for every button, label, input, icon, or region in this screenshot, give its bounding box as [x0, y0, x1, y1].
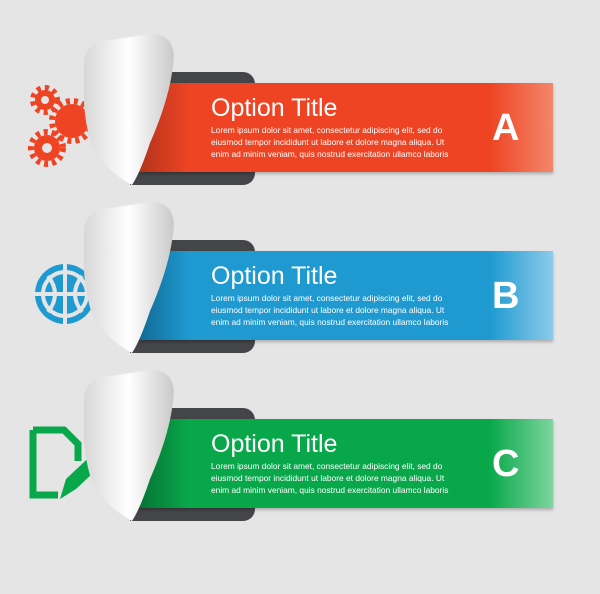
text C	[211, 461, 448, 495]
banner B	[130, 251, 553, 340]
icon: document pencil	[30, 426, 90, 499]
text C: enim ad minim veniam, quis nostrud exercitation ullamco laboris	[211, 485, 448, 495]
paper curl A	[84, 35, 174, 185]
letter A: A	[492, 107, 519, 149]
dark band	[130, 408, 255, 521]
item B	[35, 203, 554, 353]
banner A	[130, 83, 553, 172]
title A: Option Title	[211, 94, 337, 122]
dark band	[130, 72, 255, 185]
text A: enim ad minim veniam, quis nostrud exercitation ullamco laboris	[211, 149, 448, 159]
text A: Lorem ipsum dolor sit amet, consectetur adipiscing elit, sed do	[211, 125, 442, 135]
text C: eiusmod tempor incididunt ut labore et dolore magna aliqua. Ut	[211, 473, 444, 483]
item C	[30, 370, 554, 521]
text B: enim ad minim veniam, quis nostrud exercitation ullamco laboris	[211, 317, 448, 327]
text B	[211, 293, 448, 327]
paper curl B	[84, 203, 174, 353]
icon: gears	[28, 85, 88, 167]
dark band	[130, 240, 255, 353]
item A	[28, 35, 554, 185]
icon: globe	[35, 264, 91, 324]
banner C	[130, 419, 553, 508]
text B: eiusmod tempor incididunt ut labore et dolore magna aliqua. Ut	[211, 305, 444, 315]
title C: Option Title	[211, 430, 337, 458]
letter C: C	[492, 443, 519, 485]
text A: eiusmod tempor incididunt ut labore et dolore magna aliqua. Ut	[211, 137, 444, 147]
title B: Option Title	[211, 262, 337, 290]
text B: Lorem ipsum dolor sit amet, consectetur adipiscing elit, sed do	[211, 293, 442, 303]
text C: Lorem ipsum dolor sit amet, consectetur adipiscing elit, sed do	[211, 461, 442, 471]
text A	[211, 125, 448, 159]
letter B: B	[492, 275, 519, 317]
paper curl C	[84, 370, 174, 521]
